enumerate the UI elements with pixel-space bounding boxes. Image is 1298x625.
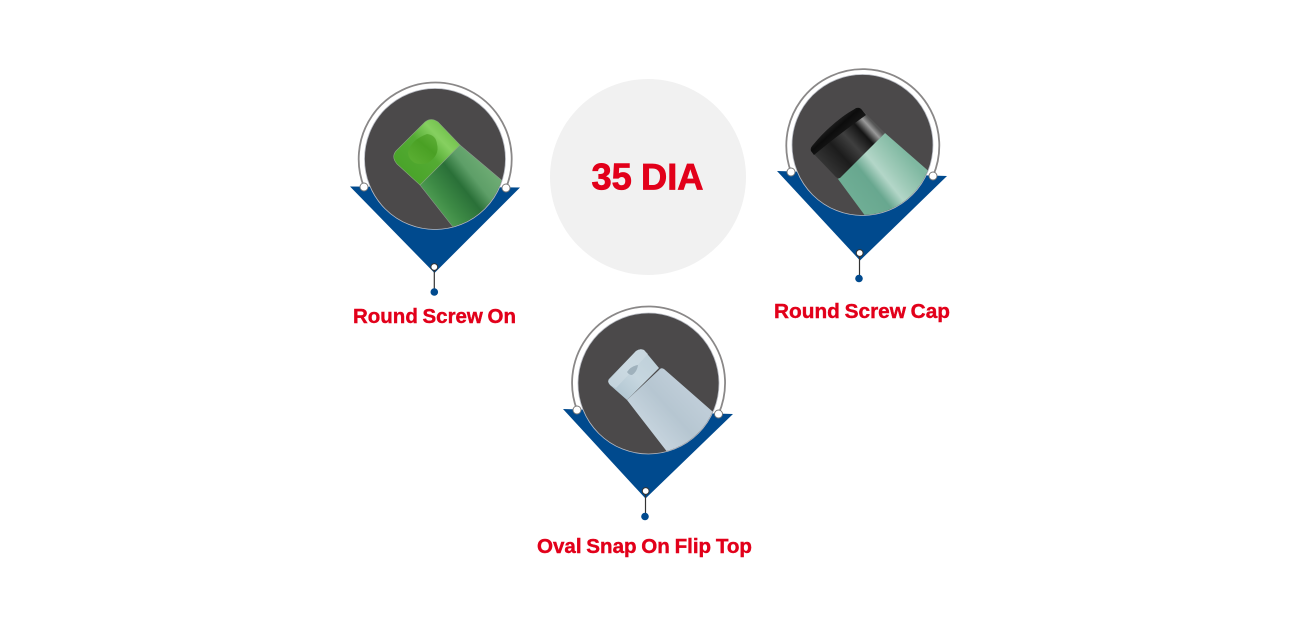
connector dots [787,168,937,282]
dark circle [792,74,933,216]
blue triangle [563,409,733,498]
outer arc [359,83,512,188]
icon: pale blue flip-top bottle [608,349,712,451]
label: Round Screw Cap [774,300,950,323]
connector dots [360,183,510,296]
icon: teal bottle with black cap [810,108,928,215]
blue triangle [777,171,947,260]
panel: Oval Snap On Flip Top [537,306,752,558]
panel: Round Screw On [350,83,520,328]
centre circle: 35 DIA [550,79,746,275]
connector dots [573,406,722,520]
dark circle [578,313,719,454]
panel: Round Screw Cap [774,69,950,323]
heading: 35 DIA: 35 DIA [592,156,704,198]
outer arc [572,306,725,414]
label: Round Screw On [353,305,516,328]
outer arc [786,69,939,176]
label: Oval Snap On Flip Top [537,535,752,558]
blue triangle [350,186,520,273]
dark circle [364,88,506,230]
icon: green bottle [393,119,502,226]
